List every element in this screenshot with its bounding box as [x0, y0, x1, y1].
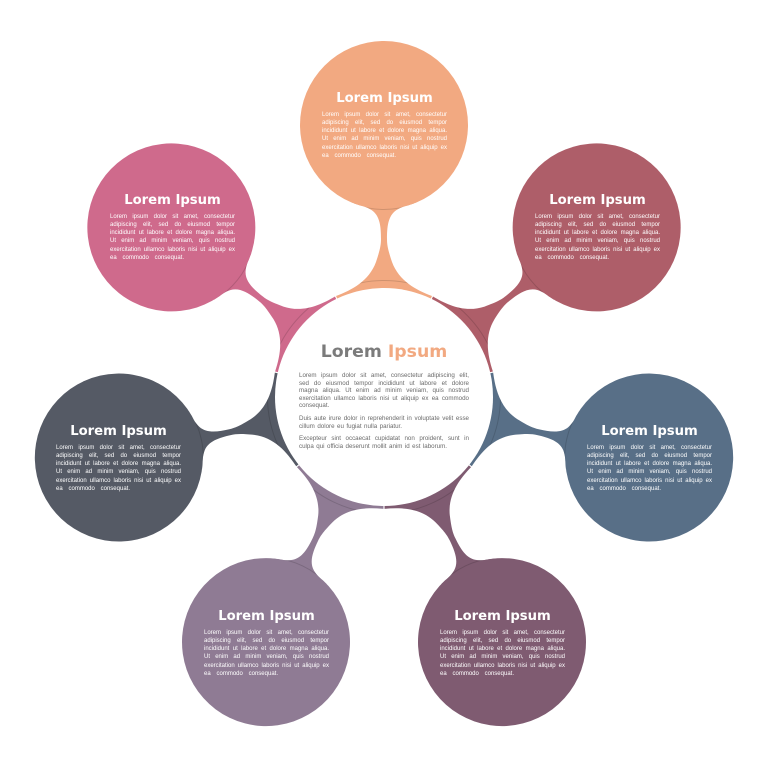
text: incididunt ut labore et dolore magna aliqua. — [110, 230, 235, 236]
text: Ut enim ad minim veniam, quis nostrud — [204, 654, 329, 660]
text: Lorem ipsum dolor sit amet, consectetur — [535, 214, 660, 220]
petal: upper left pink — [33, 84, 548, 561]
text: exercitation ullamco laboris nisi ut aliquip ex — [56, 478, 181, 484]
text: adipiscing elit, sed do eiusmod tempor — [440, 638, 565, 644]
text: exercitation ullamco laboris nisi ut aliquip ex — [204, 662, 329, 668]
text: exercitation ullamco laboris nisi ut aliquip ex — [110, 246, 235, 252]
text: Lorem ipsum dolor sit amet, consectetur — [440, 630, 565, 636]
text: ea commodo consequat. — [56, 486, 130, 492]
petal: right blue — [244, 257, 757, 590]
text: Lorem ipsum dolor sit amet, consectetur — [56, 444, 181, 450]
text: incididunt ut labore et dolore magna aliqua. — [535, 230, 660, 236]
text: exercitation ullamco laboris nisi ut aliquip ex — [440, 662, 565, 668]
petal: lower right plum — [228, 241, 644, 768]
petal: left slate — [11, 257, 524, 590]
text: ea commodo consequat. — [204, 671, 278, 677]
text: Lorem Ipsum — [124, 193, 221, 208]
text: adipiscing elit, sed do eiusmod tempor — [587, 453, 712, 459]
text: ea commodo consequat. — [110, 255, 184, 261]
text: Ut enim ad minim veniam, quis nostrud — [535, 238, 660, 244]
central white circle — [275, 288, 493, 506]
text: Lorem Ipsum — [218, 609, 315, 624]
text: ea commodo consequat. — [587, 486, 661, 492]
center paragraph 1 — [299, 372, 469, 409]
text: incididunt ut labore et dolore magna aliqua. — [587, 461, 712, 467]
text: Ut enim ad minim veniam, quis nostrud — [110, 238, 235, 244]
center paragraph 1: sed do eiusmod tempor incididunt ut labore et dolore — [299, 380, 469, 386]
petal: top orange — [268, 40, 500, 514]
text: Lorem Ipsum — [549, 193, 646, 208]
text: Lorem ipsum dolor sit amet, consectetur — [110, 214, 235, 220]
text: exercitation ullamco laboris nisi ut aliquip ex — [587, 478, 712, 484]
text: Lorem ipsum dolor sit amet, consectetur — [587, 444, 712, 450]
text: right circle — [587, 424, 712, 492]
text: incididunt ut labore et dolore magna aliqua. — [440, 646, 565, 652]
text: Ut enim ad minim veniam, quis nostrud — [587, 469, 712, 475]
center paragraph 3: culpa qui officia deserunt mollit anim id est laborum. — [299, 442, 447, 450]
text: Ut enim ad minim veniam, quis nostrud — [322, 136, 447, 142]
text: Lorem Ipsum — [454, 609, 551, 624]
center paragraph 3 — [299, 435, 469, 450]
text: Ut enim ad minim veniam, quis nostrud — [440, 654, 565, 660]
text: Lorem Ipsum — [601, 424, 698, 439]
text: adipiscing elit, sed do eiusmod tempor — [535, 222, 660, 228]
petal: upper right red — [220, 84, 735, 561]
text: adipiscing elit, sed do eiusmod tempor — [110, 222, 235, 228]
center paragraph 1: Lorem ipsum dolor sit amet, consectetur adipiscing elit, — [299, 372, 469, 379]
center heading: Lorem Ipsum — [321, 342, 447, 362]
text: lower right circle — [440, 609, 565, 677]
center paragraph 1: exercitation ullamco laboris nisi ut aliquip ex ea commodo — [299, 394, 469, 402]
text: Lorem Ipsum — [336, 91, 433, 106]
text: Lorem Ipsum — [70, 424, 167, 439]
text: incididunt ut labore et dolore magna aliqua. — [322, 128, 447, 134]
text: lower left circle — [204, 609, 329, 677]
center text block — [299, 342, 469, 450]
text: ea commodo consequat. — [440, 671, 514, 677]
text: left circle — [56, 424, 181, 492]
text: upper right circle — [535, 193, 660, 261]
text: ea commodo consequat. — [535, 255, 609, 261]
petal: lower left mauve — [124, 241, 540, 768]
center paragraph 2: Duis aute irure dolor in reprehenderit in voluptate velit esse — [299, 415, 469, 422]
text: adipiscing elit, sed do eiusmod tempor — [204, 638, 329, 644]
text: incididunt ut labore et dolore magna aliqua. — [56, 461, 181, 467]
text: exercitation ullamco laboris nisi ut aliquip ex — [535, 246, 660, 252]
text: incididunt ut labore et dolore magna aliqua. — [204, 646, 329, 652]
center paragraph 2 — [299, 415, 469, 430]
text: Ut enim ad minim veniam, quis nostrud — [56, 469, 181, 475]
center paragraph 3: Excepteur sint occaecat cupidatat non proident, sunt in — [299, 435, 469, 442]
text: upper left circle — [110, 193, 235, 261]
center paragraph 2: cillum dolore eu fugiat nulla pariatur. — [299, 422, 402, 430]
text: top circle — [322, 91, 447, 159]
text: Lorem ipsum dolor sit amet, consectetur — [322, 112, 447, 118]
text: adipiscing elit, sed do eiusmod tempor — [56, 453, 181, 459]
text: adipiscing elit, sed do eiusmod tempor — [322, 120, 447, 126]
text: exercitation ullamco laboris nisi ut aliquip ex — [322, 144, 447, 150]
text: ea commodo consequat. — [322, 153, 396, 159]
center paragraph 1: magna aliqua. Ut enim ad minim veniam, quis nostrud — [299, 387, 469, 394]
center paragraph 1: consequat. — [299, 402, 329, 409]
text: Lorem ipsum dolor sit amet, consectetur — [204, 630, 329, 636]
